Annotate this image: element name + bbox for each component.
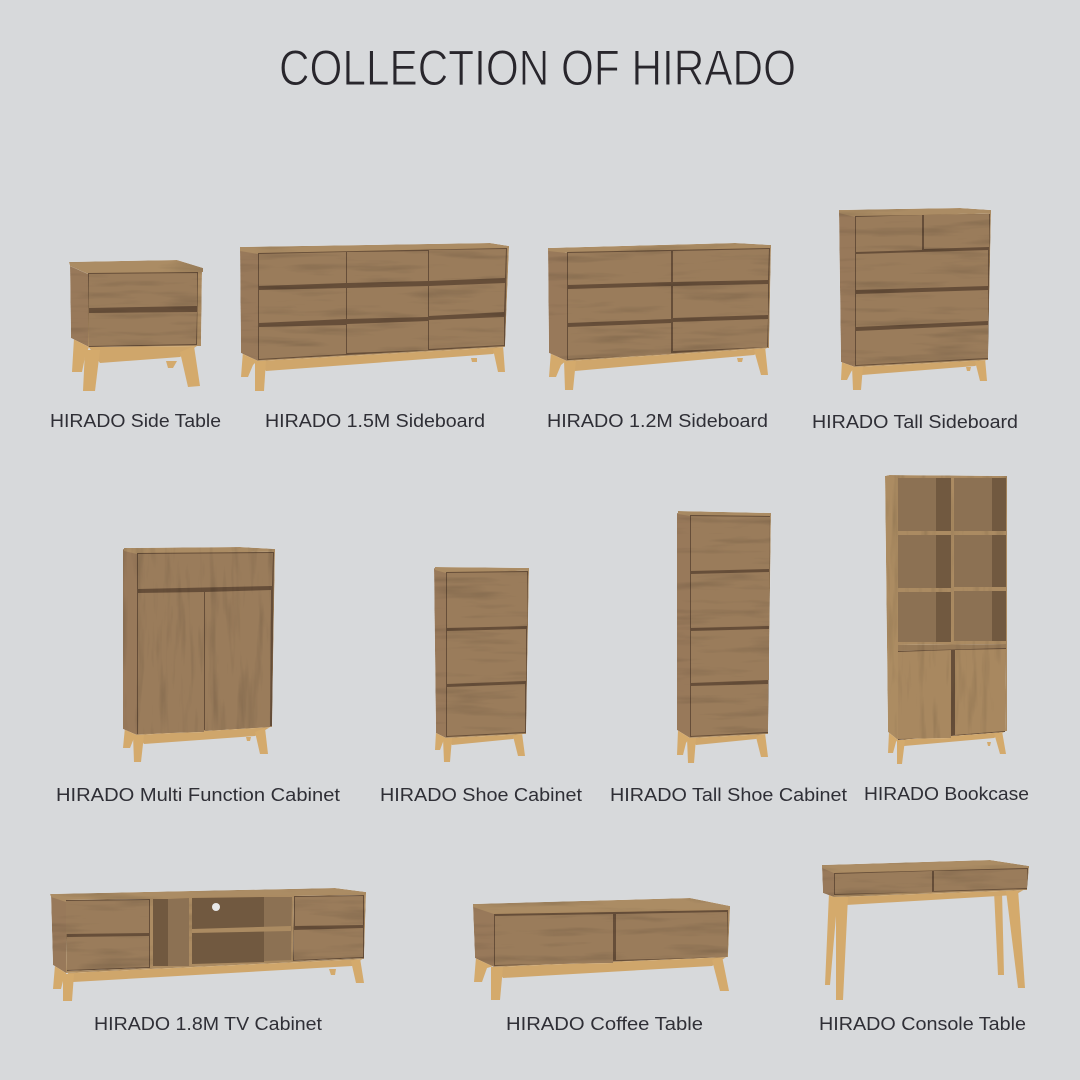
label: tall sideboard: HIRADO Tall Sideboard — [812, 412, 1018, 432]
cabinet body — [50, 888, 366, 973]
legs — [72, 338, 200, 391]
cabinet body — [69, 260, 203, 347]
furniture: 1.5M sideboard — [240, 243, 509, 391]
cabinet body — [434, 567, 529, 738]
label: TV cabinet: HIRADO 1.8M TV Cabinet — [94, 1014, 322, 1034]
drawers — [66, 895, 364, 971]
cabinet body — [822, 860, 1029, 897]
open compartments — [153, 897, 292, 966]
cabinet body — [240, 243, 509, 361]
shelf cells — [898, 478, 1006, 642]
furniture: TV cabinet — [50, 888, 366, 1001]
label: multi function cabinet: HIRADO Multi Function Cabinet — [56, 785, 340, 805]
cabinet body — [839, 208, 991, 367]
legs — [888, 731, 1006, 764]
label: console table: HIRADO Console Table — [819, 1014, 1026, 1034]
furniture: tall shoe cabinet — [677, 511, 771, 763]
legs — [825, 888, 1027, 1000]
frame — [885, 475, 1007, 740]
cabinet body — [548, 243, 771, 361]
cabinet body — [473, 898, 730, 967]
label: tall shoe cabinet: HIRADO Tall Shoe Cabinet — [610, 785, 847, 805]
label: side table: HIRADO Side Table — [50, 411, 221, 431]
label: shoe cabinet: HIRADO Shoe Cabinet — [380, 785, 582, 805]
legs — [474, 956, 729, 1000]
legs — [241, 345, 505, 391]
furniture: bookcase — [885, 475, 1007, 764]
label: coffee table: HIRADO Coffee Table — [506, 1014, 703, 1034]
label: bookcase: HIRADO Bookcase — [864, 784, 1029, 804]
furniture: coffee table — [473, 898, 730, 1000]
cabinet body — [677, 511, 771, 738]
furniture: shoe cabinet — [434, 567, 529, 762]
cabinet body — [123, 547, 275, 735]
legs — [435, 732, 525, 762]
legs — [677, 730, 768, 763]
legs — [123, 726, 272, 762]
furniture: 1.2M sideboard — [548, 243, 771, 390]
label: 1.5M sideboard: HIRADO 1.5M Sideboard — [265, 411, 485, 431]
legs — [53, 958, 364, 1001]
furniture: console table — [822, 860, 1029, 1000]
furniture: side table — [69, 260, 203, 391]
legs — [841, 358, 988, 390]
title: COLLECTION OF HIRADO — [279, 40, 796, 96]
furniture: multi function cabinet — [123, 547, 275, 762]
icon: cable hole — [212, 903, 220, 911]
legs — [549, 346, 769, 390]
label: 1.2M sideboard: HIRADO 1.2M Sideboard — [547, 411, 768, 431]
doors — [898, 644, 1006, 740]
furniture: tall sideboard — [839, 208, 991, 390]
